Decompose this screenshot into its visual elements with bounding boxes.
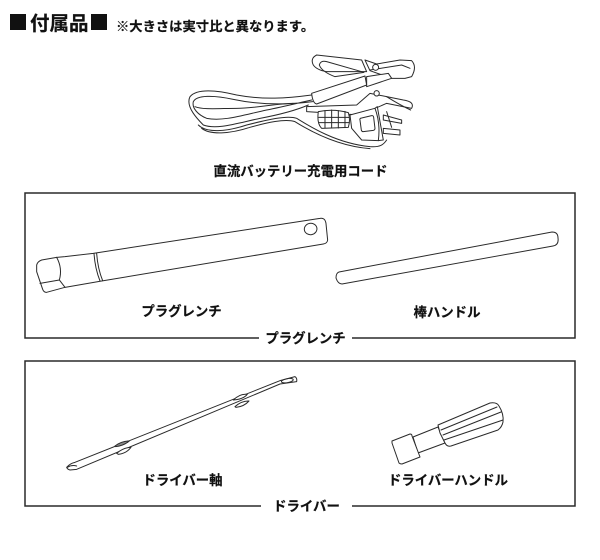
panel title: plug wrench: プラグレンチ xyxy=(265,330,346,346)
panel: plug wrench xyxy=(25,193,575,346)
size note: ※大きさは実寸比と異なります。 xyxy=(116,18,314,34)
icon: screwdriver handle xyxy=(392,403,503,464)
title: 付属品 xyxy=(30,13,89,35)
label: bar handle: 棒ハンドル xyxy=(414,305,480,320)
icon: plug wrench xyxy=(37,218,328,292)
title xyxy=(10,13,107,35)
panel: screwdriver xyxy=(25,361,575,514)
icon: bar handle xyxy=(336,232,558,284)
icon: screwdriver shaft xyxy=(67,377,297,470)
label: screwdriver handle: ドライバーハンドル xyxy=(388,473,508,488)
panel title: screwdriver: ドライバー xyxy=(273,499,340,514)
panel frame xyxy=(25,361,575,506)
label: screwdriver shaft: ドライバー軸 xyxy=(142,473,223,488)
label: plug wrench: プラグレンチ xyxy=(141,303,222,319)
caption: DC battery charging cord: 直流バッテリー充電用コード xyxy=(213,163,388,179)
panel frame xyxy=(25,193,575,338)
illustration: DC battery charging cord xyxy=(189,55,414,149)
